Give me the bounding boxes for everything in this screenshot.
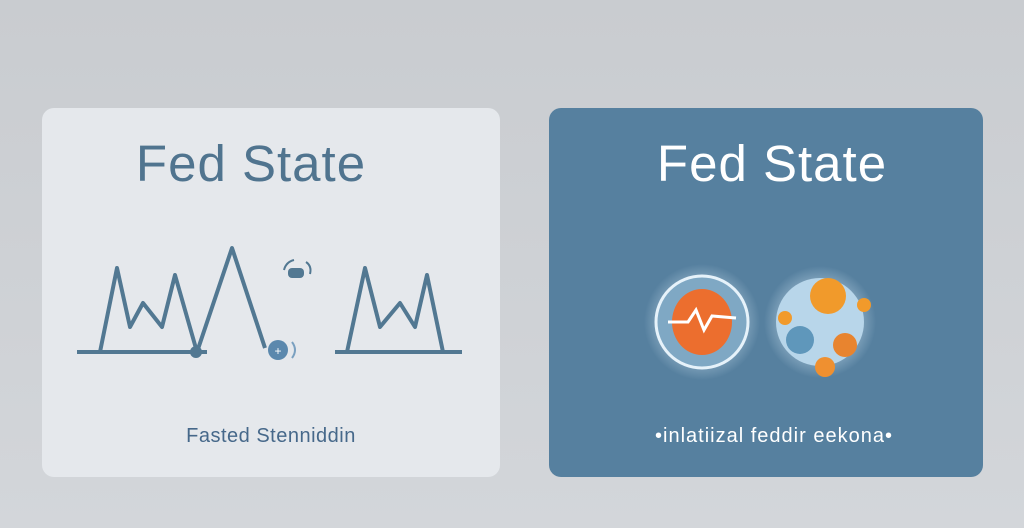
left chart xyxy=(77,246,462,360)
right caption: •inlatiizal feddir eekona• xyxy=(655,425,893,447)
icon: molecule circle xyxy=(764,266,876,378)
panel: right fed xyxy=(549,108,983,477)
right title: Fed State xyxy=(657,135,887,192)
left title: Fed State xyxy=(136,135,366,192)
icon: organ circle xyxy=(644,264,760,380)
panel: left fasted xyxy=(42,108,500,477)
icon: pill xyxy=(268,340,295,360)
left caption: Fasted Stenniddin xyxy=(186,425,356,447)
icon: pill: + xyxy=(274,344,282,358)
icon: signal xyxy=(284,260,310,278)
